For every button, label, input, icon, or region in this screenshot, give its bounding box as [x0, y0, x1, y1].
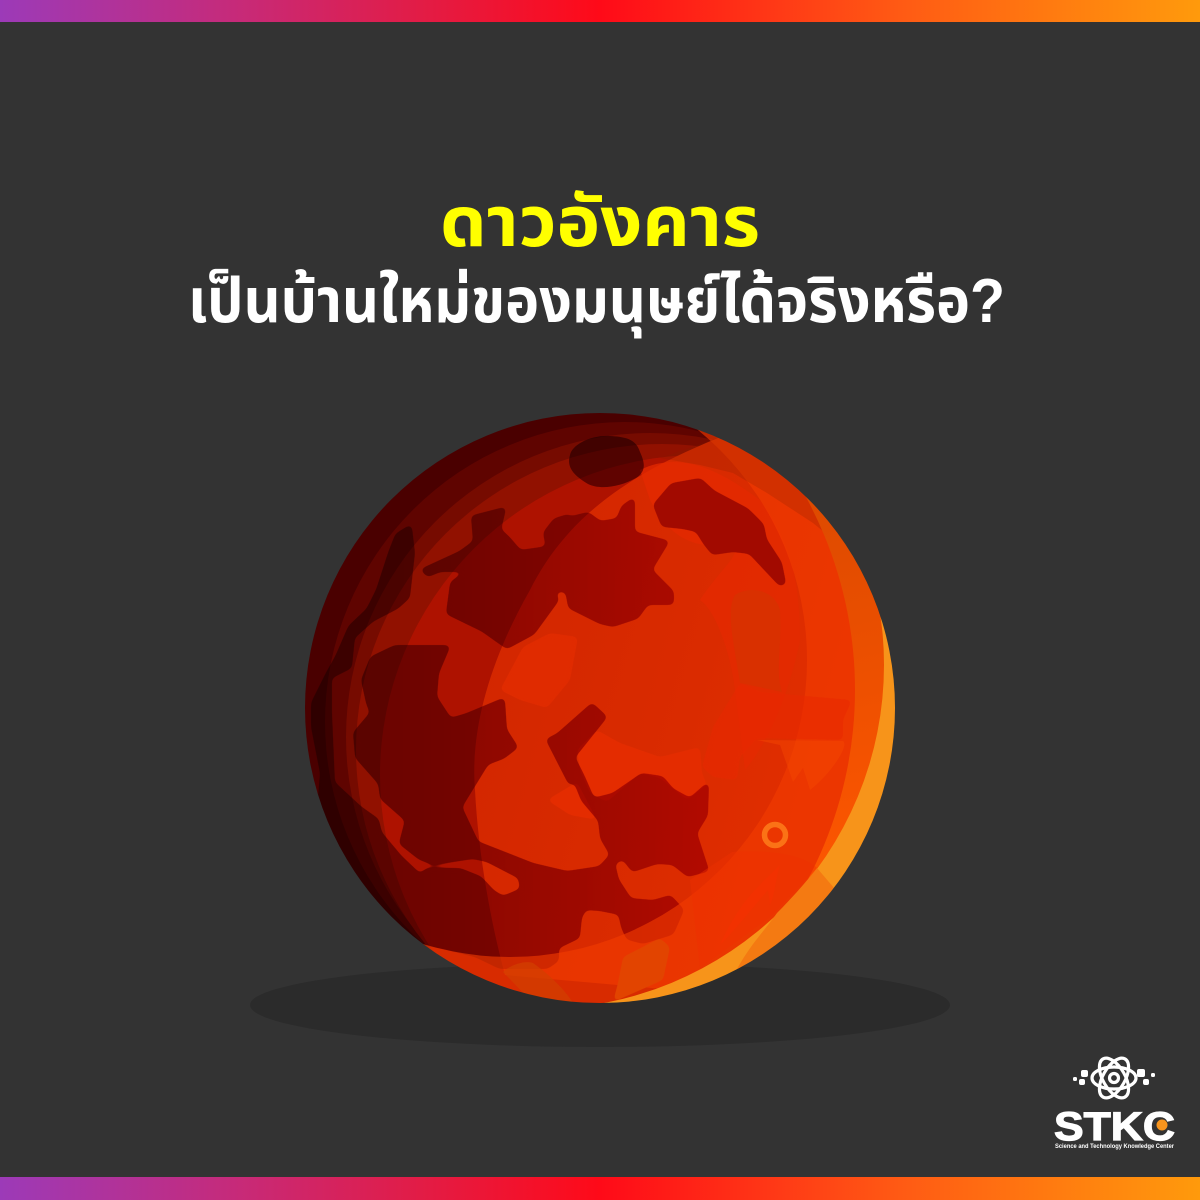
patch: eastern plateau — [731, 590, 782, 692]
southern ridge strokes — [720, 865, 780, 945]
eastern plateau overlay — [702, 683, 852, 780]
planet base layers — [305, 413, 855, 1003]
logo side dots — [1073, 1069, 1155, 1085]
logo orange dot — [1156, 1120, 1168, 1130]
patch: northern ribbon — [640, 462, 750, 616]
patch: small south-west — [550, 784, 594, 818]
planet shadow — [250, 963, 950, 1047]
outer orange band — [806, 497, 884, 879]
top gradient bar — [0, 0, 1200, 22]
rim crescent orange lens — [737, 868, 834, 969]
bright central region — [474, 438, 855, 988]
title — [188, 183, 1005, 338]
logo wordmark: STKC — [1054, 1105, 1175, 1149]
north-east dark veil — [661, 438, 822, 530]
patch: south of centre — [577, 730, 707, 802]
title line 2: white: เป็นบ้านใหม่ของมนุษย์ได้จริงหรือ? — [188, 267, 1005, 338]
southern lit patch — [614, 940, 669, 1000]
planet: Mars — [305, 413, 895, 1003]
light surface patches — [502, 462, 750, 818]
lit ridge east — [758, 740, 796, 766]
south-western lit patch — [503, 962, 573, 1003]
crater ring — [764, 824, 786, 846]
rim crescent yellow — [604, 617, 895, 1003]
logo tagline: Science and Technology Knowledge Center — [1055, 1144, 1175, 1150]
continent: polar oval — [569, 436, 644, 487]
title line 1: yellow: ดาวอังคาร — [440, 183, 760, 261]
continent: dark western lands — [300, 527, 707, 967]
eastern glow layer — [422, 430, 855, 1003]
continent: central northern lands — [423, 500, 672, 647]
southern plain shade — [698, 866, 817, 874]
continent: north-eastern lands — [655, 480, 784, 584]
logo atom icon — [1092, 1053, 1136, 1103]
logo: STKC — [1054, 1053, 1175, 1150]
bottom gradient bar — [0, 1177, 1200, 1200]
patch: west of centre — [500, 633, 578, 708]
